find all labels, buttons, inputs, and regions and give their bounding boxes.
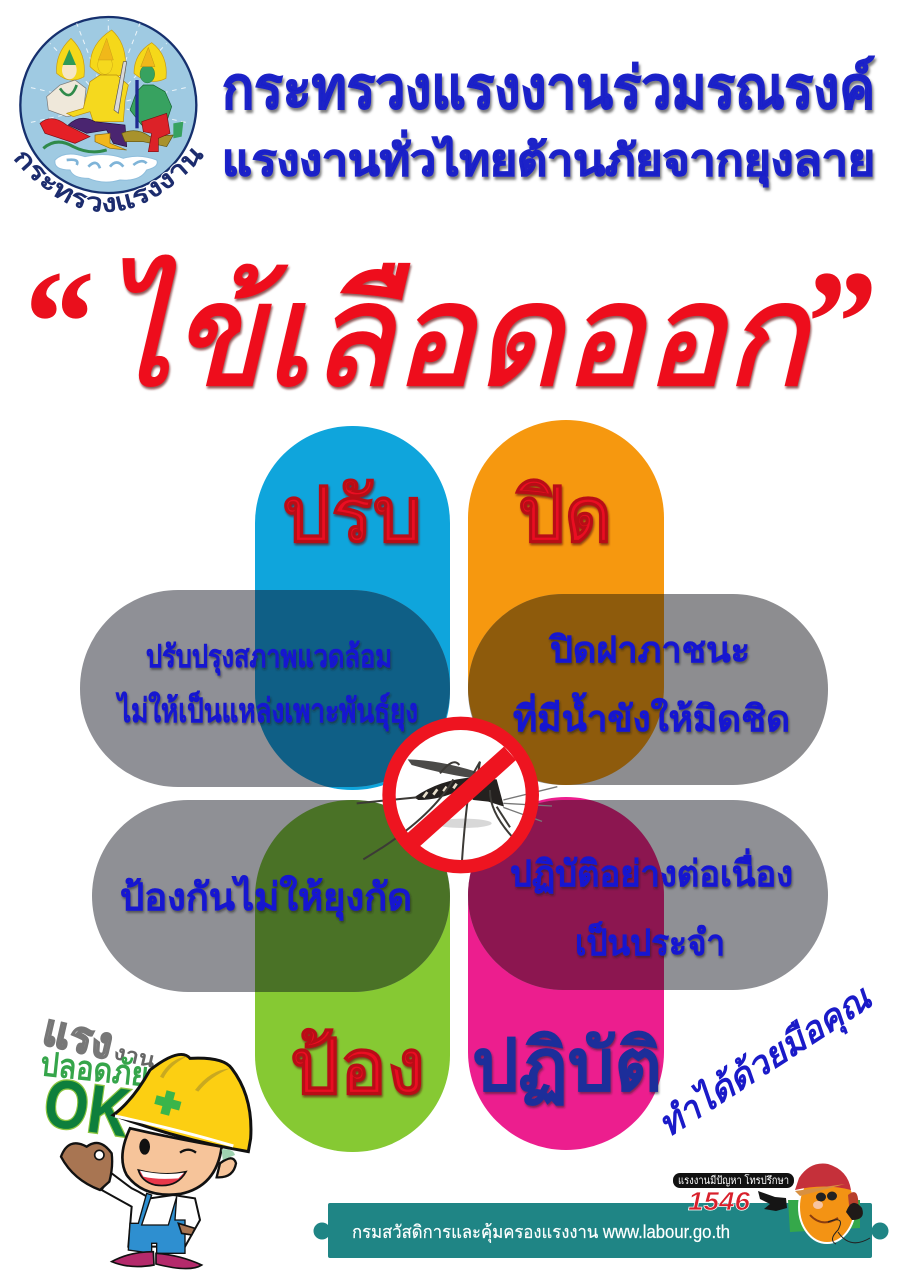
hand xyxy=(61,1143,112,1190)
label: ป้อง: ป้อง xyxy=(290,1025,425,1110)
helmet xyxy=(113,1054,251,1152)
pill: green xyxy=(255,800,450,1152)
footer text: กรมสวัสดิการและคุ้มครองแรงงาน www.labour.go.th xyxy=(352,1222,730,1243)
hotline badge: 1546 xyxy=(688,1186,751,1216)
logo text: safe labour OK: ปลอดภัย xyxy=(38,1046,150,1094)
slogan: ทำได้ด้วยมือคุณ xyxy=(651,977,880,1146)
pill: grey bottom left xyxy=(92,800,450,992)
text: improve the environment: ไม่ให้เป็นแหล่งเพาะพันธุ์ยุง xyxy=(116,690,418,732)
text: cover water containers: ที่มีน้ำขังให้มิดชิด xyxy=(513,692,790,739)
label: ปฏิบัติ: ปฏิบัติ xyxy=(472,1026,662,1106)
main title xyxy=(17,240,874,416)
text: practice continuously xyxy=(510,848,793,963)
heading line 2: แรงงานทั่วไทยต้านภัยจากยุงลาย xyxy=(222,130,875,188)
pill: grey bottom right xyxy=(468,800,828,990)
logo text: safe labour OK: แรง xyxy=(38,1006,117,1069)
text: cover water containers xyxy=(513,629,790,739)
hotline badge xyxy=(673,1173,794,1216)
main title: ” xyxy=(799,240,874,406)
pill: grey top left xyxy=(80,590,450,787)
overlap: orange and grey xyxy=(468,594,664,785)
hand on hip xyxy=(178,1223,195,1235)
text: practice continuously: ปฏิบัติอย่างต่อเนื่อง xyxy=(510,848,793,894)
logo text: safe labour OK: OK xyxy=(40,1065,134,1152)
overlap: green and grey xyxy=(255,800,450,992)
overlap: pink and grey xyxy=(468,800,664,990)
icon: no mosquito sign xyxy=(357,723,557,867)
hotline badge: แรงงานมีปัญหา โทรปรึกษา xyxy=(678,1173,789,1187)
text: improve the environment: ปรับปรุงสภาพแวดล้อม xyxy=(146,639,392,676)
logo: Ministry of Labour seal xyxy=(14,16,204,212)
main title: “ xyxy=(17,240,92,406)
mascot: orange with helmet and phone xyxy=(788,1164,870,1244)
shoes xyxy=(112,1252,154,1267)
pill: grey top right xyxy=(468,594,828,785)
face xyxy=(122,1128,222,1195)
logo text: safe labour OK: งาน xyxy=(112,1041,157,1073)
text: prevent bites: ป้องกันไม่ให้ยุงกัด xyxy=(120,875,412,921)
main title: ไข้เลือดออก xyxy=(103,256,813,416)
text: cover water containers: ปิดฝาภาชนะ xyxy=(548,629,750,670)
overlap: blue and grey xyxy=(255,590,450,787)
footer bar xyxy=(314,1203,888,1258)
overalls xyxy=(128,1193,185,1253)
label: ปรับ: ปรับ xyxy=(282,473,422,558)
text: practice continuously: เป็นประจำ xyxy=(575,920,725,963)
text: improve the environment xyxy=(116,639,418,732)
arm and shirt xyxy=(102,1173,200,1247)
logo text: safe labour OK xyxy=(38,1006,157,1152)
mascot: worker with safety OK logo xyxy=(38,1006,251,1269)
logo caption: กระทรวงแรงงาน xyxy=(14,148,204,212)
pill: orange xyxy=(468,420,664,785)
pill: blue xyxy=(255,426,450,790)
pill: pink xyxy=(468,797,664,1150)
label: ปิด: ปิด xyxy=(515,473,612,558)
